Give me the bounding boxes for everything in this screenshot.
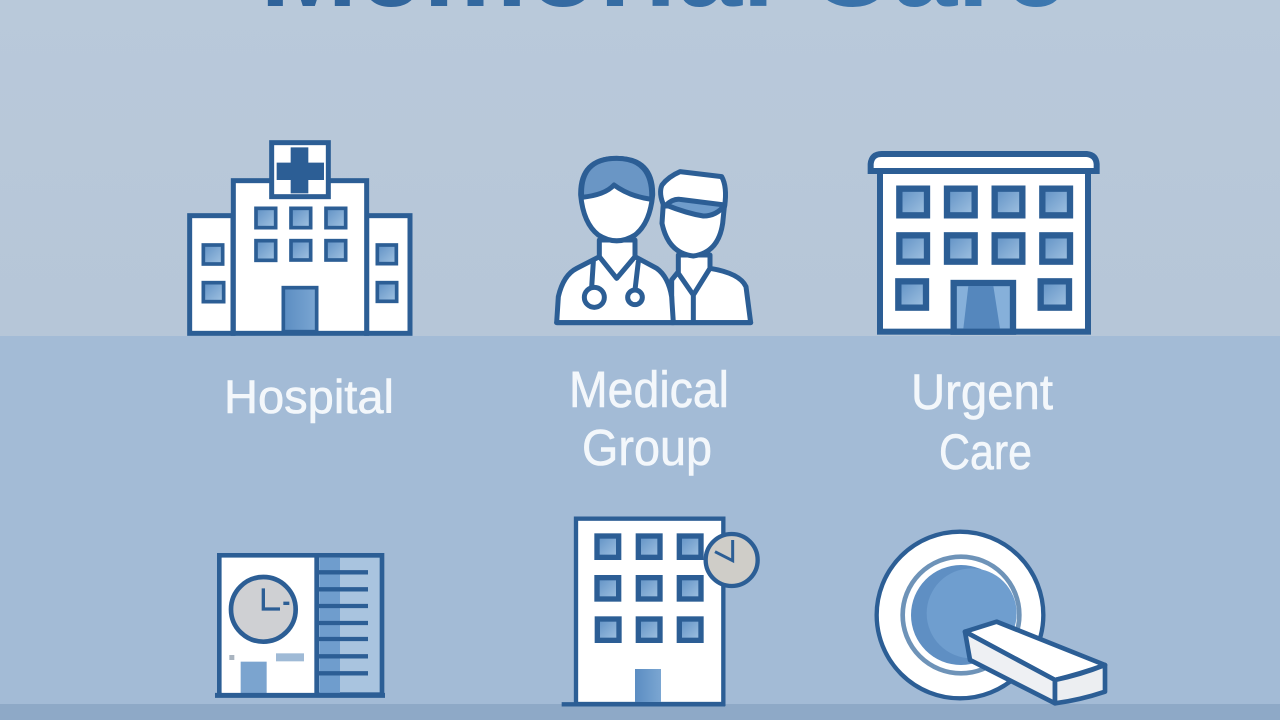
label: Urgent Care: Urgent	[911, 364, 1053, 420]
label: Medical Group: Medical	[569, 361, 729, 418]
label: Hospital: Hospital	[224, 370, 394, 423]
label: Urgent Care	[911, 364, 1053, 480]
second clinician	[661, 172, 751, 323]
icon: imaging scanner	[877, 532, 1105, 703]
icon: medical group	[557, 158, 751, 323]
label: Medical Group: Group	[582, 419, 712, 476]
background: lower panel	[0, 336, 1280, 704]
background: bottom band	[0, 704, 1280, 720]
label: Medical Group	[569, 361, 729, 476]
icon: urgent care	[871, 154, 1097, 332]
icon: clinic with clock	[215, 555, 385, 695]
background: upper panel	[0, 0, 1280, 336]
label: Urgent Care: Care	[939, 424, 1032, 480]
icon: office building with clock	[562, 519, 758, 704]
first clinician	[557, 158, 673, 323]
icon: hospital	[190, 143, 410, 333]
